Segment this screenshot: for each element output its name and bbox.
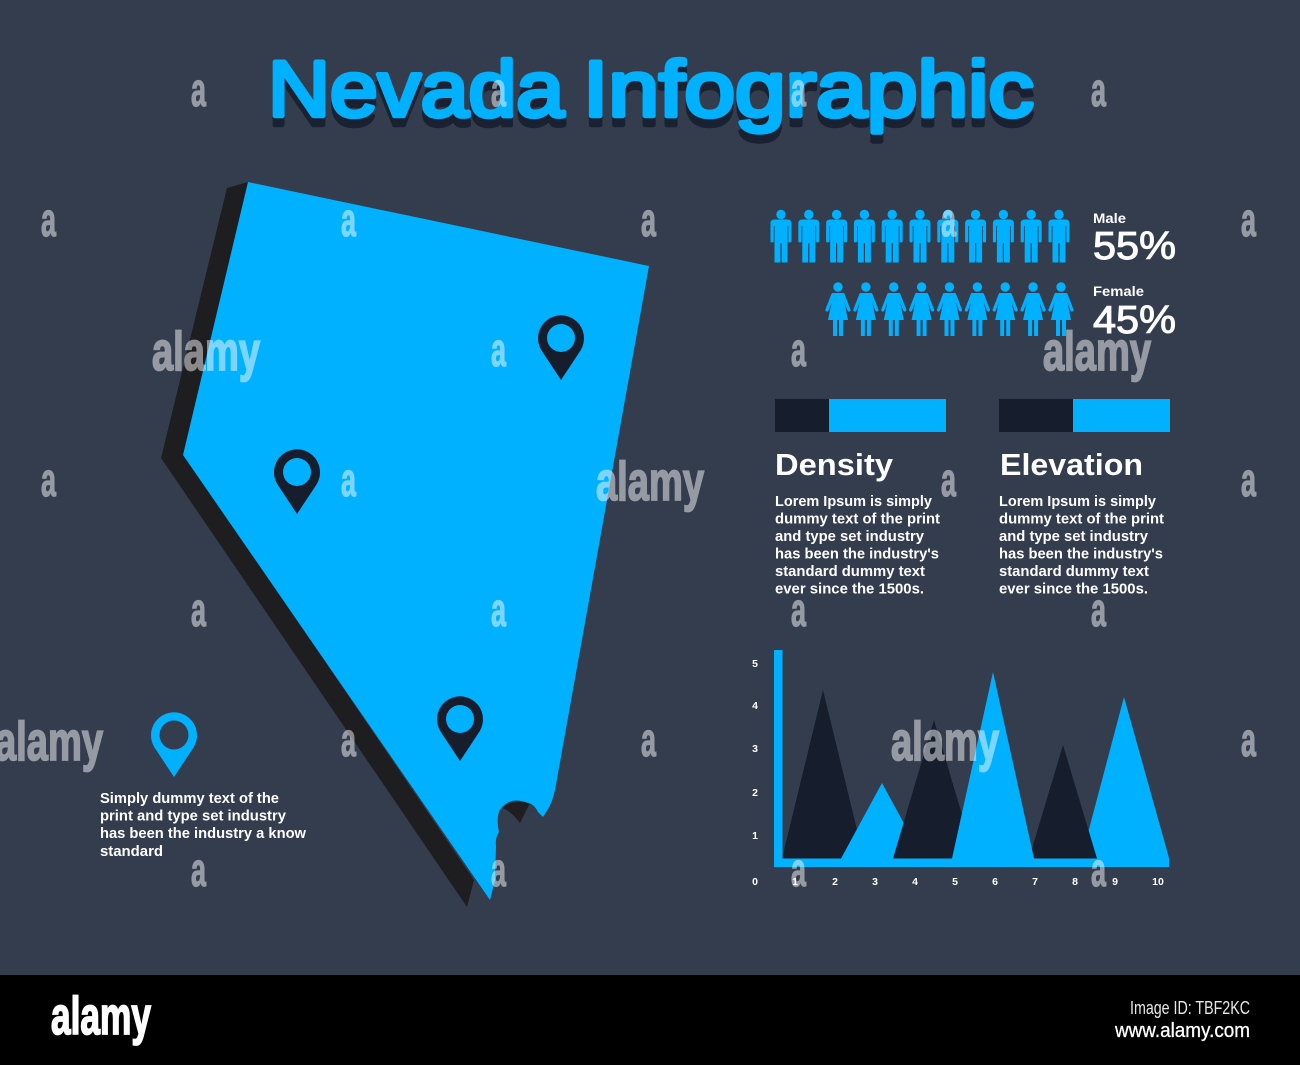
location pin 3 — [437, 696, 483, 761]
peak at 3 — [841, 783, 923, 858]
x axis labels: 2 — [832, 876, 838, 888]
watermarks: a — [191, 843, 206, 896]
watermarks: a — [1241, 193, 1256, 246]
density bar — [775, 399, 946, 432]
title: Nevada — [268, 44, 564, 133]
watermarks: alamy — [891, 710, 999, 772]
elevation text: has been the industry's — [999, 546, 1163, 562]
watermarks: a — [491, 583, 506, 636]
watermarks: a — [791, 323, 806, 376]
watermarks: a — [641, 713, 656, 766]
title: Infographic — [583, 44, 1034, 133]
male pictogram row — [770, 210, 1070, 262]
watermarks: a — [191, 63, 206, 116]
female pictogram row — [827, 282, 1072, 336]
density text: dummy text of the print — [775, 512, 940, 528]
legend text: Simply dummy text of the — [100, 791, 279, 807]
watermarks: a — [341, 713, 356, 766]
watermarks: a — [941, 453, 956, 506]
map shadow — [161, 182, 474, 907]
watermarks: a — [41, 453, 56, 506]
elevation text — [999, 494, 1164, 598]
watermarks: alamy — [596, 450, 704, 512]
watermarks: a — [191, 583, 206, 636]
x axis labels: 9 — [1112, 876, 1118, 888]
density text: ever since the 1500s. — [775, 582, 924, 598]
y axis labels: 4 — [752, 700, 758, 712]
legend text: standard — [100, 844, 163, 860]
location pin 2 — [274, 449, 320, 514]
elevation text: standard dummy text — [999, 564, 1149, 580]
image id: Image ID: TBF2KC — [1130, 998, 1250, 1018]
triangle chart — [752, 650, 1169, 888]
location pin 1 — [538, 315, 584, 380]
y axis labels: 2 — [752, 787, 758, 799]
elevation bar — [999, 399, 1170, 432]
watermarks: a — [1091, 63, 1106, 116]
title — [268, 44, 1034, 142]
y axis labels: 1 — [752, 830, 758, 842]
x axis labels: 8 — [1072, 876, 1078, 888]
notch shadow — [502, 802, 530, 823]
elevation text: and type set industry — [999, 529, 1148, 545]
website: www.alamy.com — [1114, 1020, 1250, 1042]
watermarks: a — [791, 843, 806, 896]
elevation text: Lorem Ipsum is simply — [999, 494, 1156, 510]
watermarks: a — [491, 323, 506, 376]
legend text: print and type set industry — [100, 808, 286, 824]
watermarks: a — [491, 63, 506, 116]
female label: Female — [1093, 283, 1144, 299]
watermarks: a — [41, 193, 56, 246]
peak at 6 — [952, 672, 1034, 858]
elevation text: ever since the 1500s. — [999, 582, 1148, 598]
watermarks: a — [341, 193, 356, 246]
watermarks: a — [791, 583, 806, 636]
peak at 4 — [893, 720, 975, 858]
watermarks: a — [1091, 583, 1106, 636]
watermarks: a — [941, 193, 956, 246]
watermarks: a — [1241, 713, 1256, 766]
female label — [1093, 283, 1176, 342]
title: Nevada — [268, 53, 564, 142]
x axis labels: 7 — [1032, 876, 1038, 888]
density text: and type set industry — [775, 529, 924, 545]
density text — [775, 494, 940, 598]
peak at 1 — [782, 690, 864, 858]
legend pin — [151, 712, 197, 777]
map: Nevada — [161, 182, 649, 907]
male label: Male — [1093, 210, 1126, 226]
watermarks — [0, 63, 1256, 896]
watermarks: a — [341, 453, 356, 506]
density text: standard dummy text — [775, 564, 925, 580]
elevation text: dummy text of the print — [999, 512, 1164, 528]
legend text: has been the industry a know — [100, 826, 307, 842]
footer bar — [0, 975, 1300, 1065]
watermarks: alamy — [152, 320, 260, 382]
x axis labels — [752, 876, 1164, 888]
peak at 8 — [1029, 745, 1097, 858]
density text: Lorem Ipsum is simply — [775, 494, 932, 510]
density text: has been the industry's — [775, 546, 939, 562]
watermarks: a — [1091, 843, 1106, 896]
density heading: Density — [775, 447, 894, 482]
male label: 55% — [1093, 225, 1176, 268]
y axis labels: 3 — [752, 743, 758, 755]
x axis labels: 1 — [792, 876, 798, 888]
watermarks: alamy — [1043, 320, 1151, 382]
footer logo: alamy — [51, 987, 151, 1046]
female label: 45% — [1093, 299, 1176, 342]
male label — [1093, 210, 1176, 268]
watermarks: a — [491, 843, 506, 896]
watermarks: a — [641, 193, 656, 246]
title: Infographic — [583, 53, 1034, 142]
y axis labels — [752, 658, 758, 842]
watermarks: a — [791, 63, 806, 116]
watermarks: a — [1241, 453, 1256, 506]
x axis labels: 5 — [952, 876, 958, 888]
legend text — [100, 791, 307, 860]
x axis labels: 4 — [912, 876, 918, 888]
chart axes — [774, 650, 1169, 867]
y axis labels: 5 — [752, 658, 758, 670]
peak at 9 — [1079, 697, 1169, 867]
elevation heading: Elevation — [1000, 447, 1143, 482]
state shape — [183, 182, 649, 900]
x axis labels: 3 — [872, 876, 878, 888]
x axis labels: 10 — [1152, 876, 1164, 888]
x axis labels: 0 — [752, 876, 758, 888]
x axis labels: 6 — [992, 876, 998, 888]
